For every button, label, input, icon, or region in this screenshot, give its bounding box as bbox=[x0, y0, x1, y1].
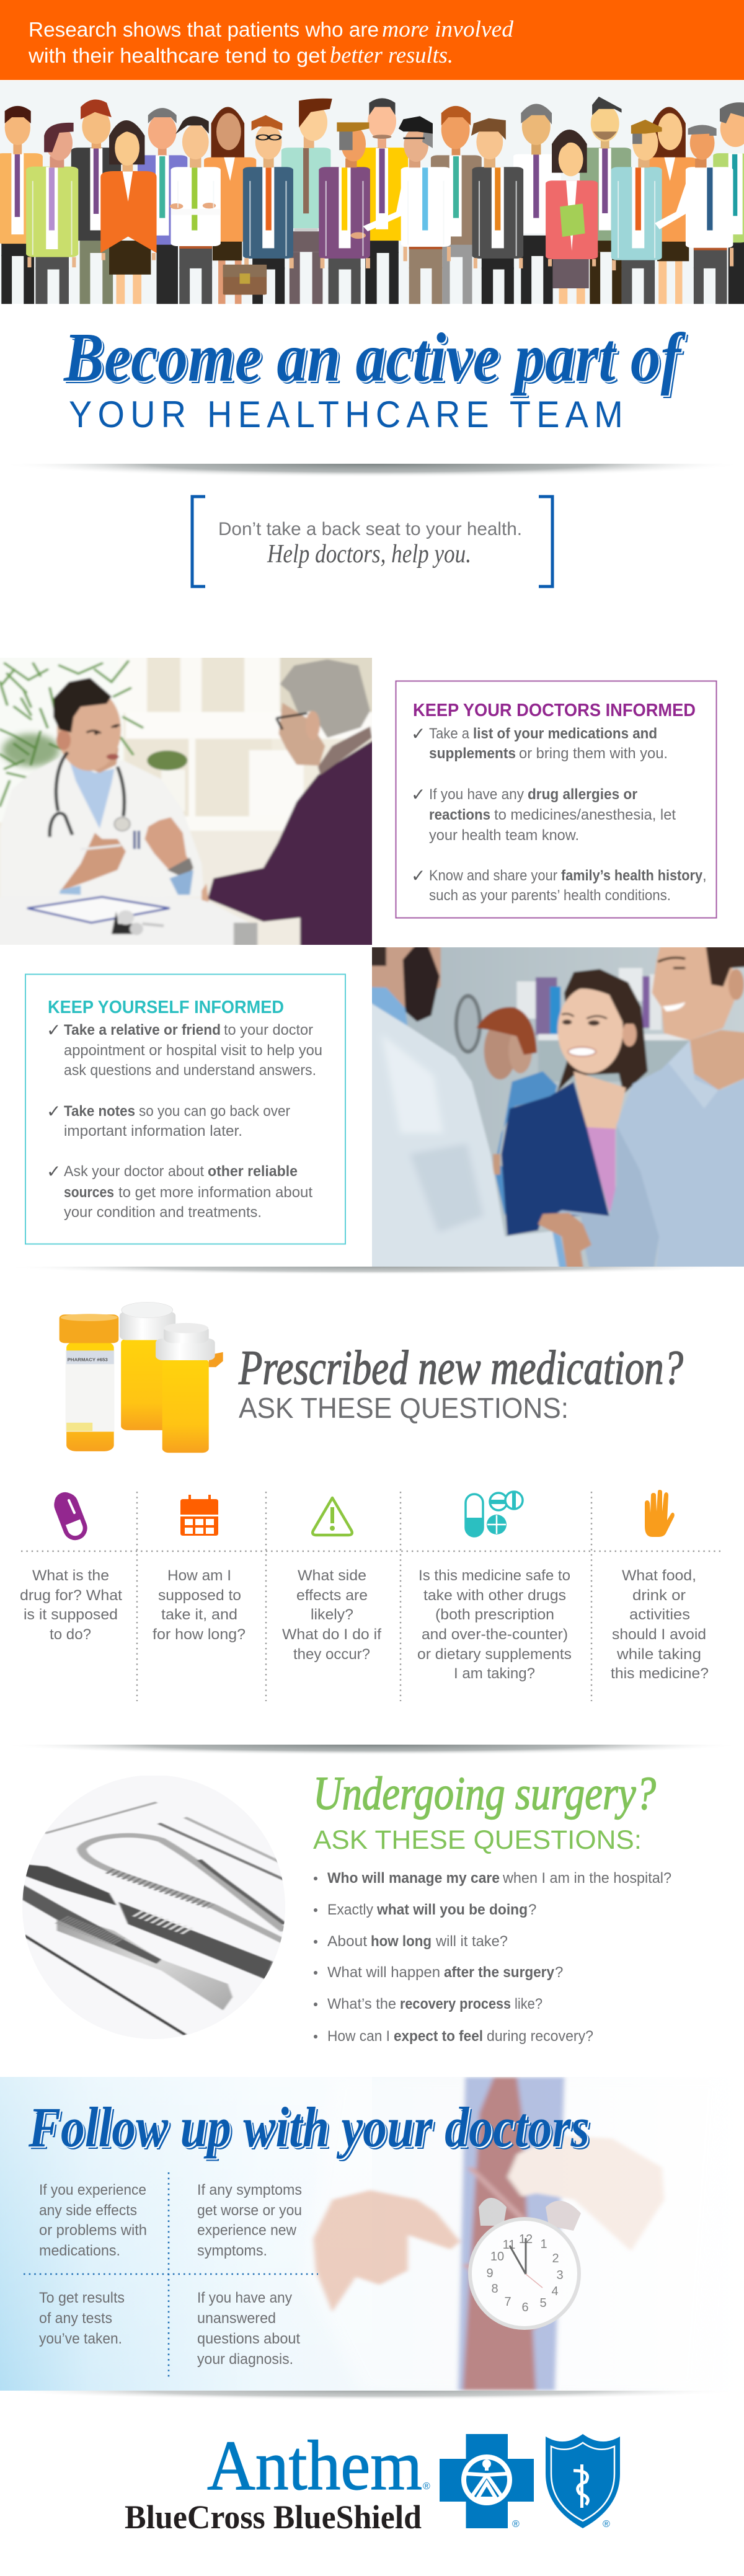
person back row 9 bbox=[281, 99, 332, 304]
person front 16, woman coral with folder bbox=[546, 130, 598, 304]
front left bottle with label bbox=[60, 1314, 118, 1451]
checklist item 1: Take a bbox=[429, 725, 470, 742]
reason 3 bbox=[39, 2290, 125, 2347]
reason 4: questions about bbox=[197, 2330, 300, 2347]
icon: capsule bbox=[53, 1492, 88, 1541]
heading: undergoing surgery bbox=[313, 1768, 656, 1855]
reason 2: get worse or you bbox=[197, 2202, 302, 2219]
question 3: What side bbox=[298, 1567, 366, 1584]
heading: prescribed new medication bbox=[238, 1340, 683, 1424]
alarm clock bbox=[470, 2198, 581, 2328]
briefcase bbox=[223, 265, 267, 294]
photo: doctor and patient bbox=[0, 658, 372, 945]
person back row 1 bbox=[0, 106, 43, 304]
surgery question 1: Who will manage my care bbox=[327, 1870, 500, 1887]
person front 6, white shirt bbox=[170, 116, 221, 304]
alarm clock: 11 bbox=[503, 2238, 515, 2252]
reason 4 bbox=[197, 2290, 300, 2368]
checklist item 1: supplements bbox=[429, 745, 516, 762]
checklist item 1: appointment or hospital visit to help you bbox=[64, 1042, 322, 1059]
question 3 bbox=[282, 1567, 381, 1663]
checklist item 3: sources bbox=[64, 1184, 114, 1201]
logo wordmark BlueCross BlueShield: BlueCross BlueShield bbox=[125, 2499, 422, 2536]
person front 14, gray jacket bbox=[471, 118, 523, 304]
plant bbox=[0, 662, 143, 806]
illustration: crowd of people bbox=[0, 81, 744, 304]
alarm clock: 7 bbox=[504, 2295, 512, 2309]
surgery question 5: recovery process bbox=[400, 1996, 511, 2012]
alarm clock: 3 bbox=[556, 2268, 564, 2282]
question 4: Is this medicine safe to bbox=[418, 1567, 570, 1584]
logo: shield bbox=[546, 2434, 620, 2530]
reason 4: If you have any bbox=[197, 2290, 292, 2306]
question 1 bbox=[20, 1567, 122, 1643]
checklist item 2: your health team know. bbox=[429, 827, 579, 844]
checklist item 3: to get more information about bbox=[118, 1184, 312, 1201]
jacket sleeve seams bbox=[33, 181, 655, 258]
question 4 bbox=[417, 1567, 572, 1682]
question 3: likely? bbox=[311, 1606, 353, 1623]
alarm clock: 10 bbox=[490, 2250, 504, 2264]
question 2: supposed to bbox=[158, 1587, 241, 1604]
checklist item 1: ✓ bbox=[46, 1020, 61, 1040]
alarm clock: 6 bbox=[521, 2301, 529, 2314]
surgery question 1: when I am in the hospital? bbox=[502, 1870, 671, 1887]
checklist item 3: , bbox=[702, 867, 707, 884]
surgery question 3: will it take? bbox=[435, 1933, 508, 1950]
surgery question 4: after the surgery bbox=[444, 1964, 555, 1981]
question 4: or dietary supplements bbox=[417, 1646, 572, 1663]
surgery question 4: ? bbox=[555, 1964, 563, 1981]
surgery question 3: how long bbox=[371, 1933, 432, 1950]
panel: keep yourself informed bbox=[25, 975, 345, 1244]
banner text line 1: more involved bbox=[382, 17, 514, 42]
question 2: How am I bbox=[167, 1567, 231, 1584]
alarm clock: 4 bbox=[551, 2285, 559, 2298]
question 1: to do? bbox=[50, 1626, 91, 1643]
checklist item 2: reactions bbox=[429, 807, 490, 823]
question 2: take it, and bbox=[161, 1606, 237, 1623]
crowd hands bbox=[27, 247, 733, 270]
patient bbox=[200, 658, 372, 945]
surgery question list bbox=[314, 1870, 671, 2045]
alarm clock: 1 bbox=[540, 2237, 547, 2251]
logo: cross bbox=[440, 2434, 534, 2530]
front left bottle with label: PHARMACY #653 bbox=[68, 1357, 108, 1363]
reason 3: you’ve taken. bbox=[39, 2330, 122, 2347]
reason 4: unanswered bbox=[197, 2310, 276, 2327]
surgery question 4: What will happen bbox=[327, 1964, 440, 1981]
reason 1: or problems with bbox=[39, 2222, 147, 2239]
surgery question 4 bbox=[314, 1964, 563, 1981]
person back row 21 bbox=[713, 102, 744, 304]
question 1: What is the bbox=[32, 1567, 109, 1584]
person back row 13 bbox=[431, 106, 482, 304]
checklist item 1: Take a relative or friend bbox=[64, 1022, 221, 1038]
reason 2: If any symptoms bbox=[197, 2182, 302, 2198]
checklist item 3: family’s health history bbox=[561, 867, 703, 884]
question 5: drink or bbox=[632, 1587, 686, 1604]
checklist item 3: ✓ bbox=[411, 865, 425, 886]
checklist item 3: other reliable bbox=[208, 1163, 298, 1180]
surgery question 5 bbox=[314, 1996, 542, 2012]
checklist item 1: list of your medications and bbox=[473, 725, 657, 742]
photo: handshake at clinic bbox=[372, 947, 744, 1267]
logo: shield: ® bbox=[603, 2519, 610, 2530]
panel: follow up with your doctors bbox=[0, 2077, 665, 2391]
section shadow bbox=[0, 1745, 744, 1766]
checklist item 2: to medicines/anesthesia, let bbox=[494, 807, 676, 823]
checklist item 1: ask questions and understand answers. bbox=[64, 1062, 316, 1079]
panel heading: KEEP YOURSELF INFORMED bbox=[48, 998, 284, 1017]
person back row 15 bbox=[513, 104, 561, 304]
medication question grid lines bbox=[21, 1492, 724, 1701]
question 5: activities bbox=[629, 1606, 690, 1623]
checklist item 2: Take notes bbox=[64, 1103, 135, 1120]
question 3: effects are bbox=[296, 1587, 368, 1604]
checklist item 2: so you can go back over bbox=[139, 1103, 290, 1120]
surgery question 1 bbox=[314, 1870, 671, 1887]
question 4: (both prescription bbox=[435, 1606, 554, 1623]
logo: Anthem Blue Cross Blue Shield bbox=[125, 2426, 620, 2536]
panel: keep your doctors informed bbox=[396, 681, 717, 918]
person back row 19, woman bbox=[644, 107, 696, 304]
checklist item 3: your condition and treatments. bbox=[64, 1204, 262, 1221]
section shadow bbox=[0, 464, 744, 491]
follow-up title: Follow up with your doctors bbox=[28, 2096, 590, 2159]
surgery question 2: Exactly bbox=[327, 1901, 373, 1918]
sub heading: ASK THESE QUESTIONS: bbox=[313, 1825, 642, 1855]
reason 1: medications. bbox=[39, 2242, 120, 2259]
icon: pills bbox=[466, 1492, 523, 1536]
person back row 11 bbox=[357, 98, 408, 304]
question 5: while taking bbox=[616, 1646, 701, 1663]
sub heading: ASK THESE QUESTIONS: bbox=[239, 1392, 569, 1424]
checklist item 3: Ask your doctor about bbox=[64, 1163, 204, 1180]
quote line 2: Help doctors, help you. bbox=[267, 540, 471, 569]
reason 2: experience new bbox=[197, 2222, 297, 2239]
photo: doctor with alarm clock bbox=[311, 2077, 665, 2391]
question 4: take with other drugs bbox=[423, 1587, 566, 1604]
question 2: for how long? bbox=[153, 1626, 246, 1643]
doctor bbox=[0, 678, 204, 900]
photo: prescription bottles bbox=[60, 1302, 223, 1453]
person front 18, teal jacket bbox=[611, 120, 662, 304]
section shadow bbox=[0, 1267, 744, 1283]
banner text line 1: Research shows that patients who are bbox=[29, 18, 379, 41]
right bracket bbox=[539, 497, 552, 586]
checklist item 2: If you have any bbox=[429, 786, 524, 803]
surgery question 3: About bbox=[327, 1933, 367, 1950]
question 1: is it supposed bbox=[24, 1606, 118, 1623]
title sub line: YOUR HEALTHCARE TEAM bbox=[69, 394, 629, 435]
checklist item 1 bbox=[46, 1020, 322, 1079]
question 5: should I avoid bbox=[612, 1626, 706, 1643]
alarm clock: 5 bbox=[539, 2296, 547, 2310]
alarm clock: 8 bbox=[491, 2282, 498, 2296]
checklist item 3 bbox=[46, 1161, 312, 1221]
question 3: they occur? bbox=[293, 1646, 370, 1663]
person front 2 bbox=[26, 123, 78, 304]
banner text line 2: better results. bbox=[330, 43, 453, 68]
person front 8, blue jacket with glasses bbox=[243, 115, 293, 304]
surgery question 2: ? bbox=[528, 1901, 536, 1918]
person back row 7, woman bbox=[204, 107, 256, 304]
panel heading: KEEP YOUR DOCTORS INFORMED bbox=[413, 701, 696, 720]
alarm clock: 9 bbox=[486, 2267, 494, 2280]
person front 10, purple jacket bbox=[319, 122, 370, 304]
reason 3: To get results bbox=[39, 2290, 125, 2306]
checklist item 1: to your doctor bbox=[224, 1022, 313, 1038]
doctor from behind bbox=[372, 947, 568, 1267]
checklist item 2: important information later. bbox=[64, 1123, 242, 1140]
reason 4: your diagnosis. bbox=[197, 2351, 293, 2368]
checklist item 3: Know and share your bbox=[429, 867, 557, 884]
surgery question 5: What’s the bbox=[327, 1996, 396, 2012]
icon: calendar bbox=[180, 1495, 218, 1536]
surgery question 2: what will you be doing bbox=[376, 1901, 528, 1918]
quote line 1: Don’t take a back seat to your health. bbox=[218, 519, 522, 539]
registered mark: ® bbox=[423, 2481, 430, 2492]
question 1: drug for? What bbox=[20, 1587, 122, 1604]
heading: undergoing surgery: Undergoing surgery? bbox=[313, 1768, 656, 1820]
left bracket bbox=[192, 497, 205, 586]
reason 1: If you experience bbox=[39, 2182, 146, 2198]
reason 2: symptoms. bbox=[197, 2242, 267, 2259]
quote with brackets bbox=[192, 497, 552, 586]
checklist item 1: ✓ bbox=[411, 724, 425, 744]
photo: surgical instruments in circle bbox=[22, 1800, 285, 2036]
reason 1 bbox=[39, 2182, 147, 2259]
person back row 5 bbox=[138, 108, 187, 304]
checklist item 2 bbox=[411, 784, 676, 844]
checklist item 2: drug allergies or bbox=[528, 786, 637, 803]
person front 12, white shirt handshake bbox=[351, 116, 451, 304]
logo wordmark Anthem: Anthem bbox=[207, 2426, 422, 2505]
question 5: What food, bbox=[622, 1567, 696, 1584]
handshake hands bbox=[536, 1211, 593, 1267]
follow-up dotted dividers bbox=[24, 2172, 318, 2377]
checklist item 3: ✓ bbox=[46, 1161, 61, 1182]
title bbox=[63, 319, 686, 435]
icon: warning triangle bbox=[312, 1498, 352, 1535]
surgery question 6: expect to feel bbox=[394, 2028, 483, 2045]
desk and clipboard bbox=[0, 895, 259, 945]
icon: hand bbox=[645, 1490, 675, 1537]
front right bottle bbox=[156, 1323, 223, 1453]
surgery question 6: during recovery? bbox=[487, 2028, 593, 2045]
question 4: and over-the-counter) bbox=[422, 1626, 568, 1643]
header banner bbox=[0, 0, 744, 80]
surgery question 6 bbox=[314, 2028, 593, 2045]
surgery question 6: How can I bbox=[327, 2028, 390, 2045]
reason 1: any side effects bbox=[39, 2202, 137, 2219]
alarm clock: 12 bbox=[519, 2233, 533, 2246]
checklist item 3: such as your parents’ health conditions. bbox=[429, 887, 671, 904]
checklist item 1: or bring them with you. bbox=[519, 745, 668, 762]
back bottle bbox=[120, 1302, 175, 1430]
alarm clock: 2 bbox=[552, 2252, 559, 2265]
woman in blazer bbox=[502, 969, 648, 1236]
reason 2 bbox=[197, 2182, 302, 2259]
man in blue shirt bbox=[557, 935, 744, 1282]
section shadow bbox=[0, 2391, 744, 2409]
person front 4, woman orange bbox=[100, 120, 157, 304]
person back row 3 bbox=[71, 100, 121, 304]
question 5 bbox=[611, 1567, 709, 1682]
surgery question 5: like? bbox=[515, 1996, 542, 2012]
question 4: I am taking? bbox=[454, 1665, 535, 1682]
checklist item 1 bbox=[411, 724, 668, 762]
checklist item 2: ✓ bbox=[411, 784, 425, 805]
surgery question 3 bbox=[314, 1933, 508, 1950]
banner text line 2: with their healthcare tend to get bbox=[28, 44, 326, 67]
person front 20, white shirt handshake bbox=[655, 125, 733, 304]
question 5: this medicine? bbox=[611, 1665, 709, 1682]
checklist item 2: ✓ bbox=[46, 1101, 61, 1122]
person back row 17 bbox=[580, 97, 631, 304]
logo: cross: ® bbox=[512, 2519, 520, 2530]
question 2 bbox=[153, 1567, 246, 1643]
reason 3: of any tests bbox=[39, 2310, 112, 2327]
checklist item 2 bbox=[46, 1101, 290, 1140]
checklist item 3 bbox=[411, 865, 707, 904]
question 3: What do I do if bbox=[282, 1626, 381, 1643]
